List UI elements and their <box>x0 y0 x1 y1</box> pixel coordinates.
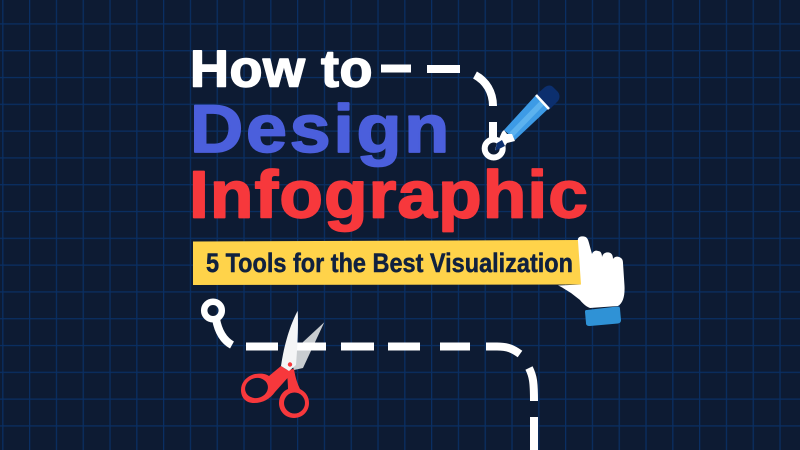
left handle <box>241 366 292 403</box>
upper blade <box>281 311 298 371</box>
right handle <box>279 369 309 418</box>
subtitle banner <box>193 240 582 285</box>
icon: pencil <box>495 86 560 151</box>
lower dashed cut line <box>204 302 534 450</box>
icon: scissors <box>241 311 326 418</box>
upper dashed cut line <box>381 68 503 158</box>
rear blade <box>290 322 324 370</box>
sleeve cuff <box>585 306 621 326</box>
title: Infographic: Infographic <box>189 158 589 232</box>
pivot screw <box>288 362 292 367</box>
subtitle text: 5 Tools for the Best Visualization <box>206 248 573 278</box>
dash over rear blade <box>297 342 326 350</box>
title: Design: Design <box>190 91 452 167</box>
title: How to: How to <box>190 40 373 98</box>
icon: pointing hand <box>558 236 625 326</box>
